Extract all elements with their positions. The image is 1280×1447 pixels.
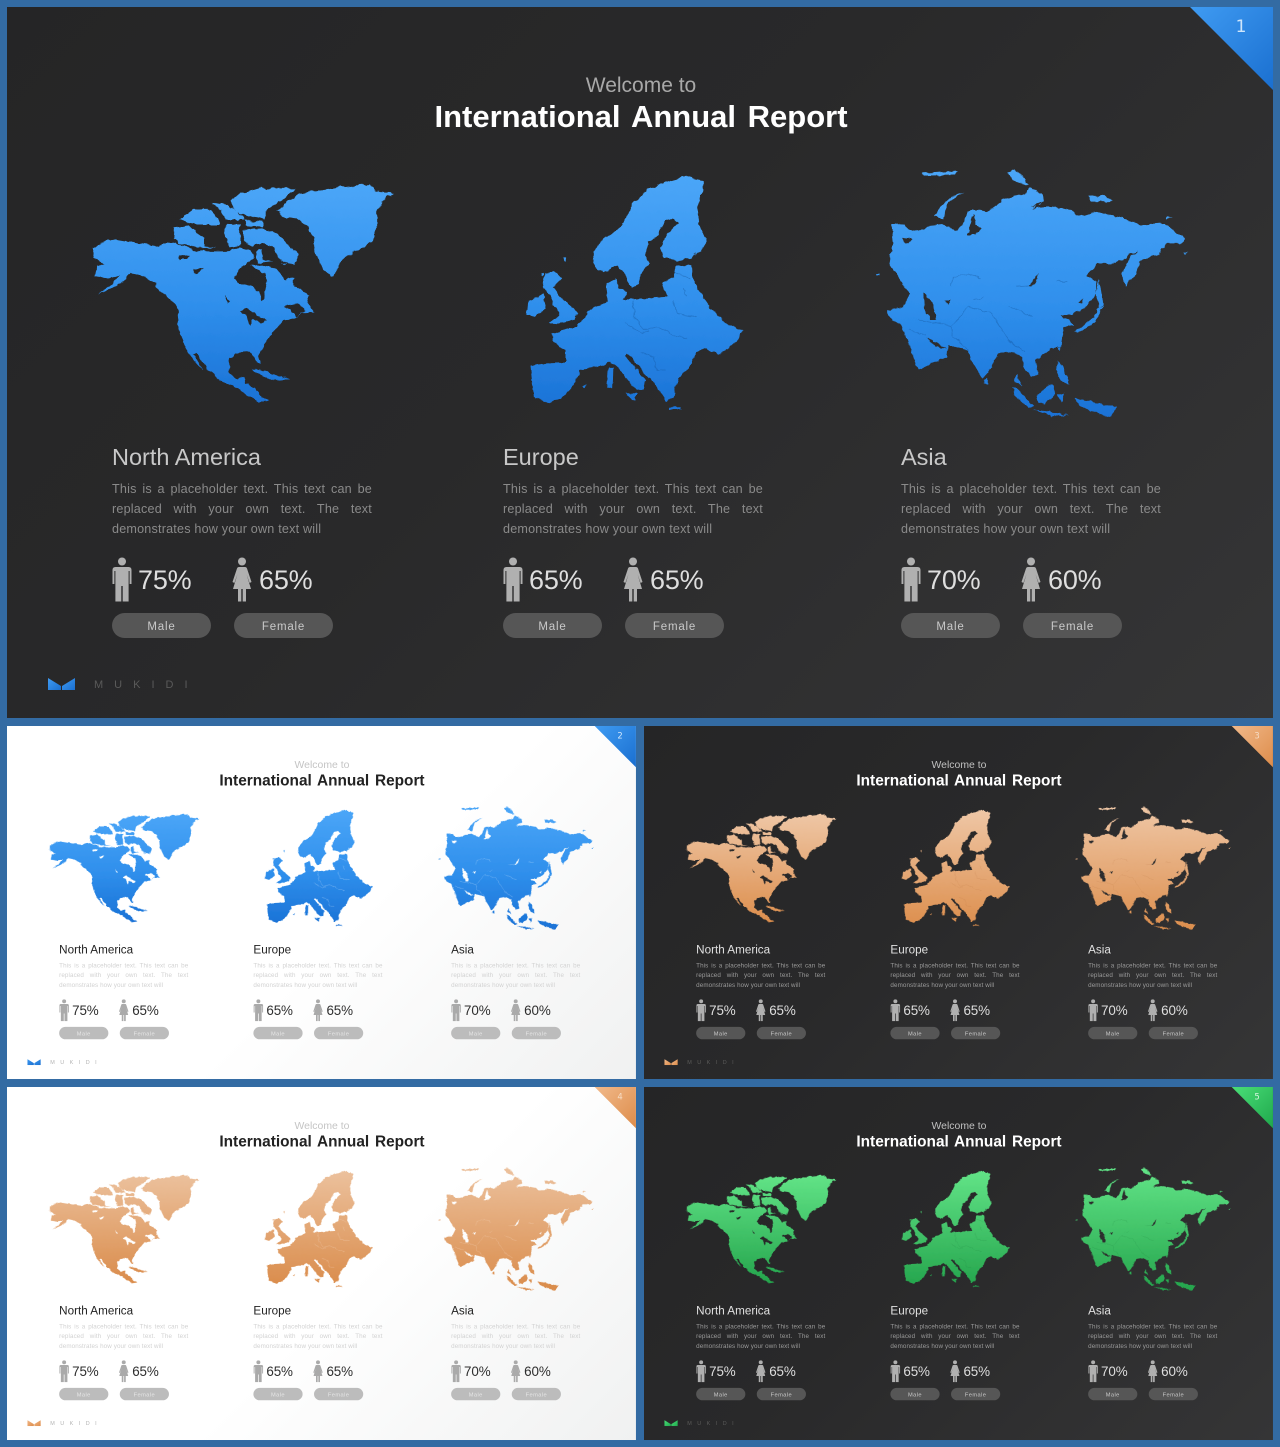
maps: three continents [27, 806, 594, 1065]
logo: MUKIDI [687, 1421, 739, 1427]
page number: 3 [1254, 731, 1260, 741]
column: Europe: Europe [253, 1304, 291, 1317]
column: North America: North America [696, 1304, 770, 1317]
column: Europe: Europe [503, 444, 579, 470]
logo [27, 1059, 102, 1066]
column: Europe: 65% [963, 1364, 990, 1379]
column: Europe [890, 1304, 1020, 1400]
column: North America: 65% [769, 1003, 796, 1018]
column: Asia: 60% [524, 1003, 551, 1018]
column: Asia [451, 1304, 580, 1400]
column: Asia: 70% [464, 1364, 491, 1379]
logo [664, 1059, 739, 1066]
column: North America: 75% [72, 1364, 99, 1379]
title: International Annual Report [219, 772, 425, 789]
column: Europe: 65% [903, 1003, 930, 1018]
page number: 5 [1254, 1092, 1260, 1102]
logo [48, 678, 198, 691]
subtitle: Welcome to [932, 759, 986, 771]
column: Europe: This is a placeholder text. This text can be replaced with your own text. The text demonstrates how your own text will [253, 1323, 383, 1350]
column: Asia [1088, 943, 1218, 1040]
panel: slide 2 light blue [7, 726, 636, 1079]
column: North America: This is a placeholder text. This text can be replaced with your own text. The text demonstrates how your own text will [112, 482, 372, 536]
column: Europe: This is a placeholder text. This text can be replaced with your own text. The text demonstrates how your own text will [503, 482, 763, 536]
maps: three continents [48, 1167, 594, 1400]
page number: 2 [617, 731, 623, 741]
maps: three continents [92, 169, 1188, 638]
column: Asia: Male [1106, 1031, 1120, 1037]
column: North America: Male [714, 1392, 728, 1398]
column: Asia: 70% [1101, 1003, 1128, 1018]
column: Europe [253, 943, 383, 1040]
column: North America: This is a placeholder text. This text can be replaced with your own text. The text demonstrates how your own text will [696, 962, 825, 989]
column: North America [696, 943, 826, 1040]
column: Europe: Europe [253, 943, 291, 956]
corner badge triangle [594, 726, 636, 768]
column: Asia: Female [1163, 1031, 1184, 1037]
column: Asia: Male [1106, 1392, 1120, 1398]
column: Asia: Female [526, 1392, 547, 1398]
column: North America: Male [714, 1031, 728, 1037]
column: Europe: 65% [266, 1364, 293, 1379]
column: North America: 65% [769, 1364, 796, 1379]
column: Asia: This is a placeholder text. This text can be replaced with your own text. The text demonstrates how your own text will [901, 482, 1161, 536]
column: North America [59, 943, 188, 1040]
column: Asia: Male [469, 1031, 483, 1037]
column: Europe: This is a placeholder text. This text can be replaced with your own text. The text demonstrates how your own text will [890, 1323, 1020, 1350]
column: North America: Female [134, 1031, 155, 1037]
subtitle: Welcome to [932, 1120, 986, 1132]
subtitle: Welcome to [586, 74, 696, 97]
corner badge triangle [594, 1087, 636, 1128]
maps: three continents [664, 806, 1231, 1065]
logo [664, 1420, 739, 1427]
column: North America: This is a placeholder text. This text can be replaced with your own text. The text demonstrates how your own text will [59, 1323, 188, 1350]
column: Europe: Male [271, 1031, 285, 1037]
logo: MUKIDI [50, 1421, 102, 1427]
column: North America: Male [77, 1392, 91, 1398]
corner badge triangle [1232, 726, 1273, 768]
column: North America [696, 1304, 826, 1400]
corner badge triangle [1190, 7, 1273, 90]
column: Asia [1088, 1304, 1218, 1400]
subtitle: Welcome to [295, 1120, 349, 1132]
column: Asia: Asia [1088, 943, 1111, 956]
column: Europe: 65% [650, 565, 703, 595]
panel: slide 1 dark blue [7, 7, 1273, 718]
logo [27, 1420, 102, 1427]
column: Asia: Asia [901, 444, 947, 470]
column: Europe: Male [271, 1392, 285, 1398]
column: Asia: This is a placeholder text. This text can be replaced with your own text. The text demonstrates how your own text will [1088, 1323, 1217, 1350]
column: Europe: Female [653, 621, 696, 633]
column: North America: 65% [259, 565, 312, 595]
column: Europe: 65% [529, 565, 582, 595]
column: North America: 75% [72, 1003, 99, 1018]
column: Europe: 65% [903, 1364, 930, 1379]
column: Asia: Asia [451, 1304, 474, 1317]
page number: 1 [1236, 17, 1246, 37]
column: Asia: Male [469, 1392, 483, 1398]
column: North America: 65% [132, 1364, 159, 1379]
column: Asia: Male [936, 621, 965, 633]
column: North America: Male [77, 1031, 91, 1037]
column: Europe: Europe [890, 1304, 928, 1317]
column: North America: Female [771, 1392, 792, 1398]
column: Europe: Male [908, 1392, 922, 1398]
column: North America [59, 1304, 188, 1400]
column: North America: 65% [132, 1003, 159, 1018]
column: North America: This is a placeholder text. This text can be replaced with your own text. The text demonstrates how your own text will [696, 1323, 825, 1350]
column: Europe: Female [965, 1392, 986, 1398]
column: North America: Female [262, 621, 305, 633]
column: Asia: Female [1163, 1392, 1184, 1398]
column: Europe: 65% [326, 1364, 353, 1379]
column: Asia: 70% [927, 565, 980, 595]
column: North America: North America [696, 943, 770, 956]
column: Asia [451, 943, 580, 1040]
column: Europe: This is a placeholder text. This text can be replaced with your own text. The text demonstrates how your own text will [890, 962, 1020, 989]
panel: slide 4 light orange [7, 1087, 636, 1440]
panel: slide 5 dark green [644, 1087, 1273, 1440]
column: Europe: Male [908, 1031, 922, 1037]
column: Europe: Europe [890, 943, 928, 956]
maps: three continents [664, 1167, 1231, 1424]
column: Asia: 60% [524, 1364, 551, 1379]
panel: slide 3 dark orange [644, 726, 1273, 1079]
logo: MUKIDI [50, 1060, 102, 1066]
column: North America: North America [59, 943, 133, 956]
column: North America: 75% [709, 1003, 736, 1018]
column: Asia: This is a placeholder text. This text can be replaced with your own text. The text demonstrates how your own text will [451, 1323, 580, 1350]
column: Asia: 70% [1101, 1364, 1128, 1379]
column: Asia [901, 444, 1161, 638]
column: North America: 75% [709, 1364, 736, 1379]
column: North America: North America [112, 444, 261, 470]
column: Asia: Female [526, 1031, 547, 1037]
column: North America: 75% [138, 565, 191, 595]
column: Europe [503, 444, 763, 638]
title: International Annual Report [434, 99, 848, 134]
column: Asia: 60% [1161, 1003, 1188, 1018]
title: International Annual Report [856, 772, 1062, 789]
column: Asia: Asia [451, 943, 474, 956]
column: Asia: 60% [1161, 1364, 1188, 1379]
column: North America [112, 444, 372, 638]
column: North America: North America [59, 1304, 133, 1317]
page number: 4 [617, 1092, 623, 1102]
column: Europe: Female [328, 1031, 349, 1037]
column: Europe [890, 943, 1020, 1040]
column: Europe: 65% [963, 1003, 990, 1018]
column: Europe: Female [328, 1392, 349, 1398]
title: International Annual Report [219, 1133, 425, 1150]
title: International Annual Report [856, 1133, 1062, 1150]
column: Europe: 65% [266, 1003, 293, 1018]
column: Asia: Asia [1088, 1304, 1111, 1317]
column: Europe: Male [538, 621, 567, 633]
column: Europe [253, 1304, 383, 1400]
corner badge triangle [1232, 1087, 1273, 1128]
column: North America: Female [771, 1031, 792, 1037]
column: Europe: This is a placeholder text. This text can be replaced with your own text. The text demonstrates how your own text will [253, 962, 383, 989]
column: Asia: Female [1051, 621, 1094, 633]
subtitle: Welcome to [295, 759, 349, 771]
logo: MUKIDI [687, 1060, 739, 1066]
column: Asia: This is a placeholder text. This text can be replaced with your own text. The text demonstrates how your own text will [1088, 962, 1217, 989]
column: Europe: Female [965, 1031, 986, 1037]
column: North America: Female [134, 1392, 155, 1398]
column: Asia: 70% [464, 1003, 491, 1018]
column: Asia: 60% [1048, 565, 1101, 595]
column: North America: Male [147, 621, 176, 633]
column: North America: This is a placeholder text. This text can be replaced with your own text. The text demonstrates how your own text will [59, 962, 188, 989]
column: Asia: This is a placeholder text. This text can be replaced with your own text. The text demonstrates how your own text will [451, 962, 580, 989]
logo: MUKIDI [94, 679, 198, 691]
column: Europe: 65% [326, 1003, 353, 1018]
